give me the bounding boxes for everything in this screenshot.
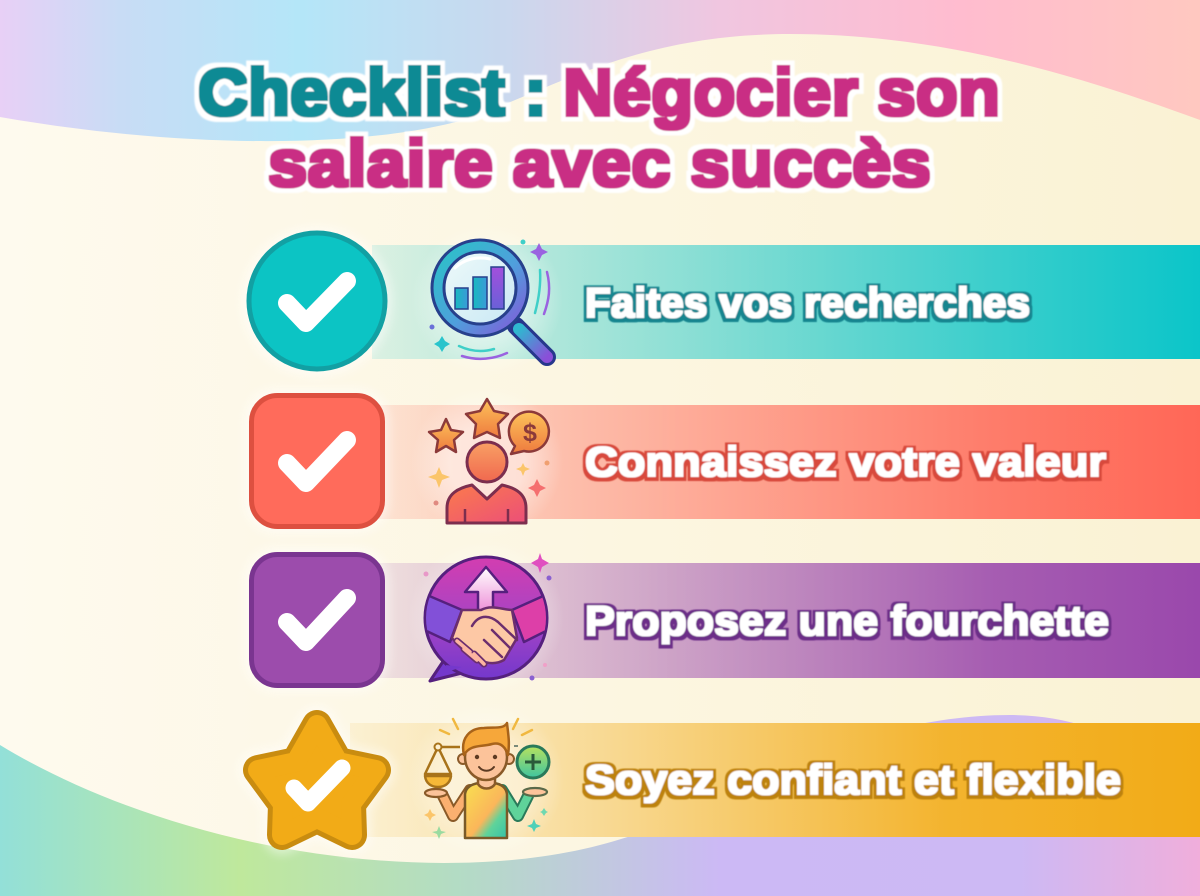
badge: purple square check — [245, 548, 389, 692]
bar 4 backing — [350, 723, 1200, 837]
badge: gold star check — [258, 725, 376, 835]
top wave — [0, 0, 1200, 141]
title: salaire avec succès: salaire avec succès — [268, 126, 931, 200]
badge: teal circle check — [242, 227, 392, 377]
label 1: Faites vos recherches — [585, 279, 1030, 326]
row 2: connaissez votre valeur — [245, 386, 1200, 538]
icon: person with stars and coin — [411, 386, 563, 538]
bar 3 — [376, 563, 1200, 678]
bar 4 — [350, 723, 1200, 837]
icon: handshake speech bubble with arrow — [424, 553, 553, 682]
label 2: Connaissez votre valeur — [585, 438, 1106, 485]
badge: coral square check — [245, 389, 389, 533]
row 4: soyez confiant et flexible — [258, 702, 1200, 858]
icon: man balancing scale and plus sign — [408, 702, 564, 858]
row 3: proposez une fourchette — [245, 540, 1200, 696]
sleeves clipped to bubble — [426, 596, 546, 644]
icon: person with stars and coin: $ — [523, 419, 537, 447]
title — [198, 55, 1000, 200]
icon: magnifying glass with bar chart — [411, 224, 563, 376]
label 3: Proposez une fourchette — [585, 597, 1109, 644]
bar 1 — [372, 245, 1200, 359]
bar 2 — [376, 405, 1200, 519]
bottom wave — [0, 715, 1200, 896]
title: négocier son: Négocier son — [563, 55, 1000, 129]
label 4: Soyez confiant et flexible — [585, 756, 1121, 803]
row 1: faites vos recherches — [242, 224, 1200, 377]
title: checklist: Checklist : — [198, 55, 547, 129]
